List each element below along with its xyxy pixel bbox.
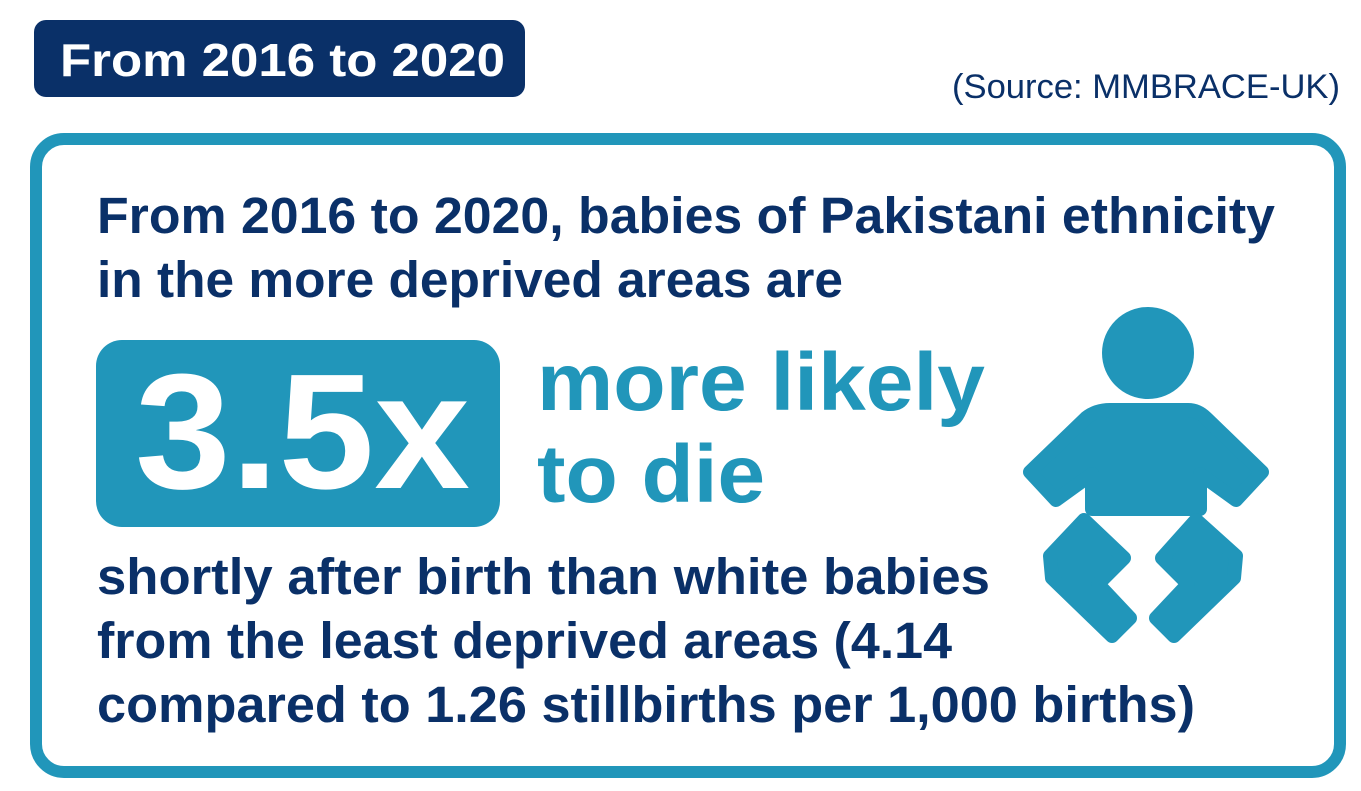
icon: baby <box>1030 307 1262 636</box>
title badge: From 2016 to 2020 <box>60 34 505 86</box>
more likely to die <box>537 337 985 520</box>
body text: shortly after birth than white babies <box>97 548 990 605</box>
body text <box>97 548 1195 733</box>
body text: compared to 1.26 stillbirths per 1,000 births) <box>97 676 1195 733</box>
more likely to die: more likely <box>537 337 985 428</box>
main panel <box>36 139 1340 772</box>
body text: from the least deprived areas (4.14 <box>97 612 953 669</box>
headline text <box>97 187 1276 308</box>
headline text: in the more deprived areas are <box>97 251 843 308</box>
more likely to die: to die <box>537 429 765 520</box>
headline text: From 2016 to 2020, babies of Pakistani ethnicity <box>97 187 1276 244</box>
source note: (Source: MMBRACE-UK) <box>952 68 1340 106</box>
stat box 3.5x: 3.5x <box>135 340 470 523</box>
title badge <box>34 20 525 97</box>
